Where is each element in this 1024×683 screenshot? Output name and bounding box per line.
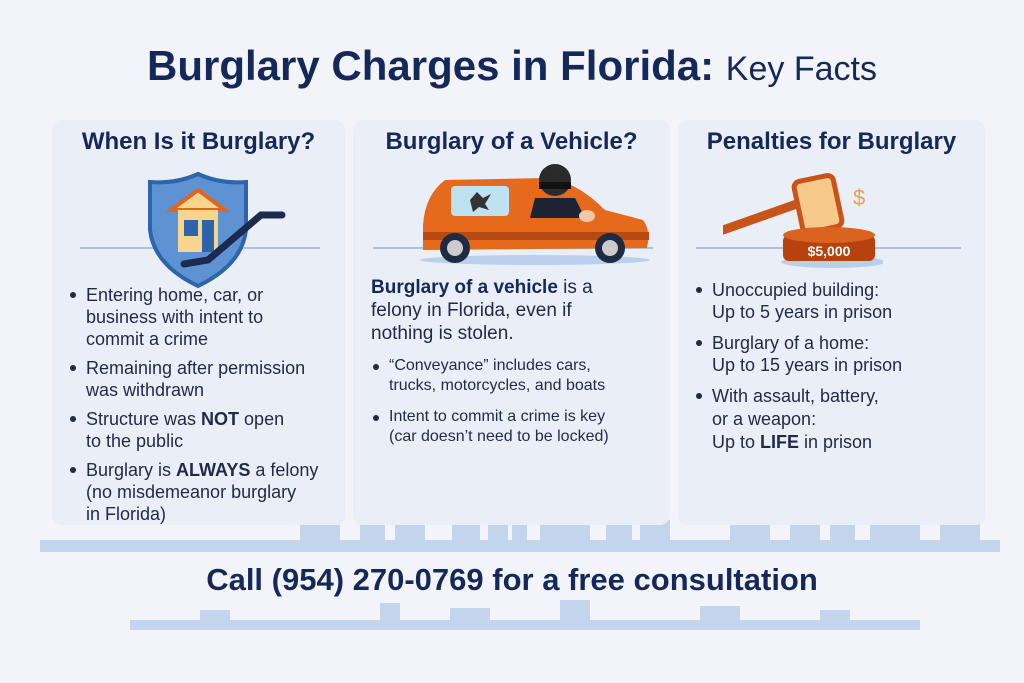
main statement: Burglary of a vehicle is a — [371, 277, 593, 298]
panel: when is it burglary — [52, 120, 345, 525]
panel: burglary of a vehicle — [353, 120, 670, 525]
bullet list: was withdrawn — [86, 380, 204, 400]
heading: Burglary of a Vehicle? — [385, 128, 638, 155]
icon: gavel with $5,000: $ — [853, 185, 865, 210]
bullet list: commit a crime — [86, 329, 208, 349]
main statement: nothing is stolen. — [371, 323, 514, 344]
bullet list: in Florida) — [86, 504, 166, 524]
bullet list: to the public — [86, 431, 183, 451]
heading: When Is it Burglary? — [82, 128, 315, 155]
bullet list: (no misdemeanor burglary — [86, 482, 296, 502]
panel: penalties — [678, 120, 985, 525]
main statement — [371, 277, 593, 344]
bullet list: Up to 5 years in prison — [712, 302, 892, 322]
bullet list: Burglary of a home: — [712, 333, 869, 353]
icon: car with burglar — [420, 164, 650, 265]
icon: gavel with $5,000: $5,000 — [808, 243, 851, 259]
bullet list: Up to LIFE in prison — [712, 432, 872, 452]
bullet list: business with intent to — [86, 307, 263, 327]
bullet list: With assault, battery, — [712, 386, 879, 406]
bullet list: (car doesn’t need to be locked) — [389, 428, 609, 445]
bullet list: trucks, motorcycles, and boats — [389, 377, 605, 394]
bullet list — [373, 357, 609, 445]
bullet list: Entering home, car, or — [86, 285, 263, 305]
bullet list: Up to 15 years in prison — [712, 355, 902, 375]
bullet list: Intent to commit a crime is key — [389, 408, 605, 425]
title: Burglary Charges in Florida: Key Facts — [147, 42, 877, 89]
main statement: felony in Florida, even if — [371, 300, 572, 321]
bullet list: or a weapon: — [712, 409, 816, 429]
bullet list: Unoccupied building: — [712, 280, 879, 300]
heading: Penalties for Burglary — [707, 128, 956, 155]
bullet list: Structure was NOT open — [86, 409, 284, 429]
footer call to action: Call (954) 270-0769 for a free consultation — [206, 562, 818, 597]
bullet list: Remaining after permission — [86, 358, 305, 378]
bullet list — [696, 280, 902, 452]
bullet list: “Conveyance” includes cars, — [389, 357, 591, 374]
icon: shield with house and crowbar — [148, 172, 286, 288]
bullet list — [70, 285, 318, 524]
skyline background — [40, 520, 1000, 630]
icon: gavel with $5,000 — [723, 173, 883, 268]
bullet list: Burglary is ALWAYS a felony — [86, 460, 318, 480]
